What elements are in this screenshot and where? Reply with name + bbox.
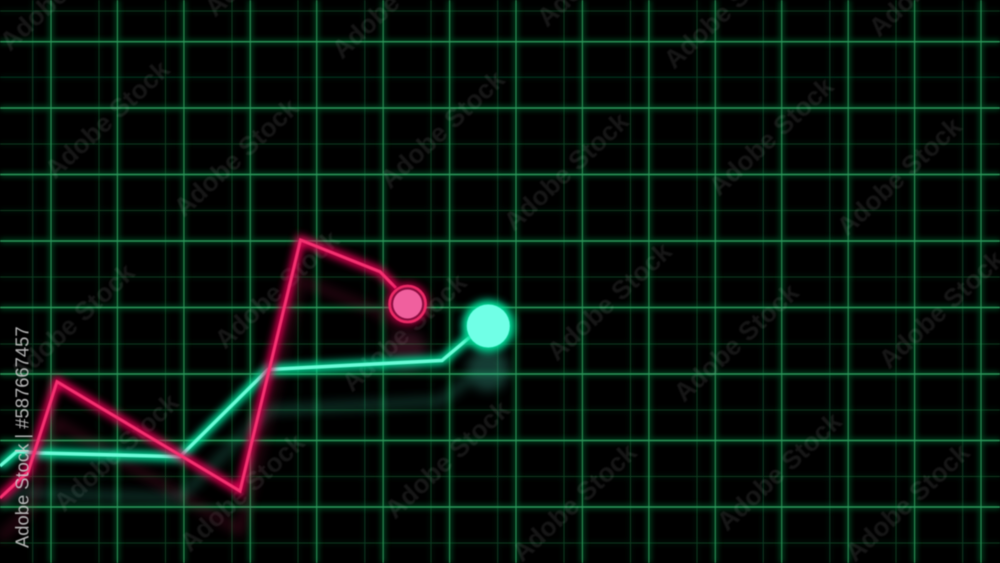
watermark: repeated Adobe Stock: Adobe Stock [711, 406, 848, 536]
watermark: repeated Adobe Stock: Adobe Stock [174, 427, 311, 557]
watermark: repeated Adobe Stock: Adobe Stock [168, 92, 305, 222]
watermark: repeated Adobe Stock: Adobe Stock [39, 54, 176, 184]
watermark: repeated Adobe Stock: Adobe Stock [668, 277, 805, 407]
teal line ghost reflection [0, 349, 509, 505]
watermark: repeated Adobe Stock: Adobe Stock [209, 224, 346, 354]
watermark: repeated Adobe Stock: Adobe Stock [374, 64, 511, 194]
watermark: repeated Adobe Stock: Adobe Stock [703, 71, 840, 201]
pink end marker [387, 283, 429, 325]
teal end marker [462, 300, 514, 352]
stock id caption: Adobe Stock | #587667457 [12, 326, 32, 548]
watermark: repeated Adobe Stock: Adobe Stock [498, 106, 635, 236]
teal data line [0, 337, 470, 466]
watermark: repeated Adobe Stock: Adobe Stock [379, 394, 516, 524]
watermark: repeated Adobe Stock: Adobe Stock [4, 257, 141, 387]
watermark: repeated Adobe Stock: Adobe Stock [541, 236, 678, 366]
pink line ghost reflection [0, 280, 426, 538]
watermark: repeated Adobe Stock: Adobe Stock [336, 267, 473, 397]
watermark: repeated Adobe Stock: Adobe Stock [831, 111, 968, 241]
pink data line [0, 240, 396, 498]
watermark: repeated Adobe Stock: Adobe Stock [48, 387, 185, 517]
